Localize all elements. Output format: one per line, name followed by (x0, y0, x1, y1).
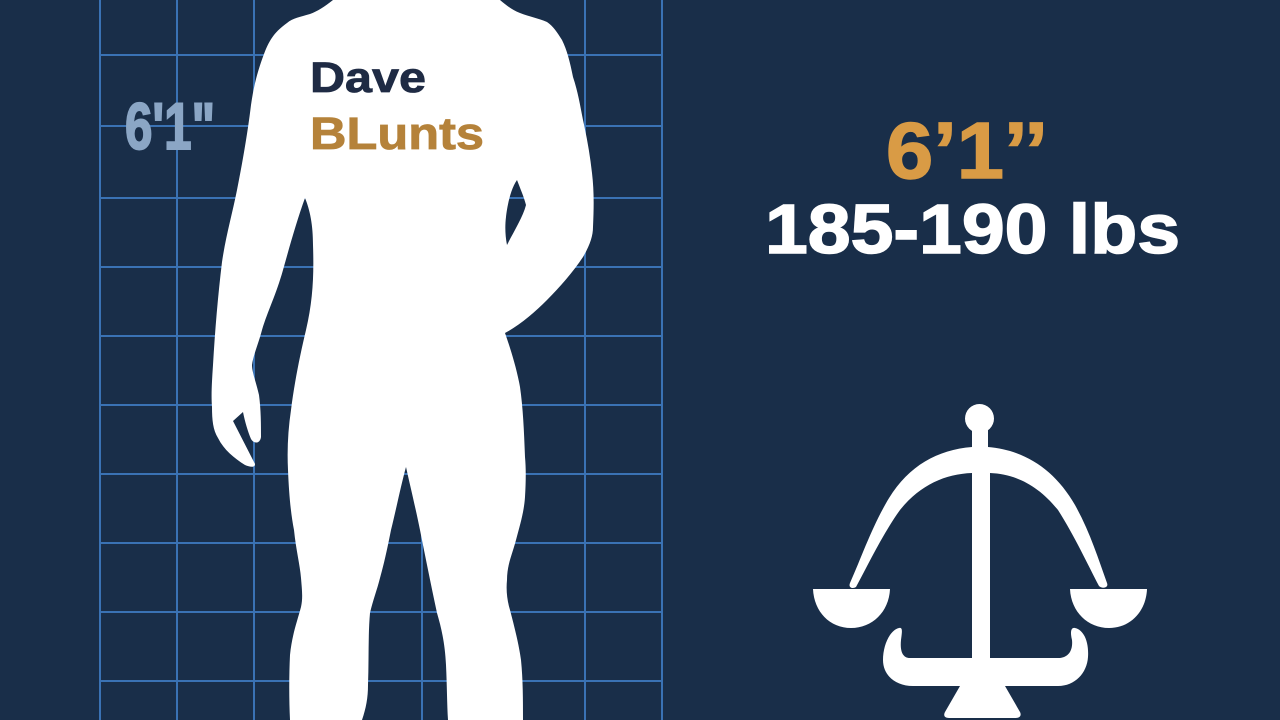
weight value: 185-190 lbs (765, 190, 1180, 268)
name: Dave: Dave (310, 54, 426, 102)
left pan (813, 589, 890, 628)
human silhouette (212, 0, 594, 720)
right pan (1070, 589, 1147, 628)
name: BLunts: BLunts (310, 108, 484, 159)
icon: balance scale (813, 404, 1147, 718)
height ruler label: 6'1" (125, 89, 215, 163)
height grid (100, 0, 662, 720)
height value: 6’1’’ (886, 106, 1048, 195)
